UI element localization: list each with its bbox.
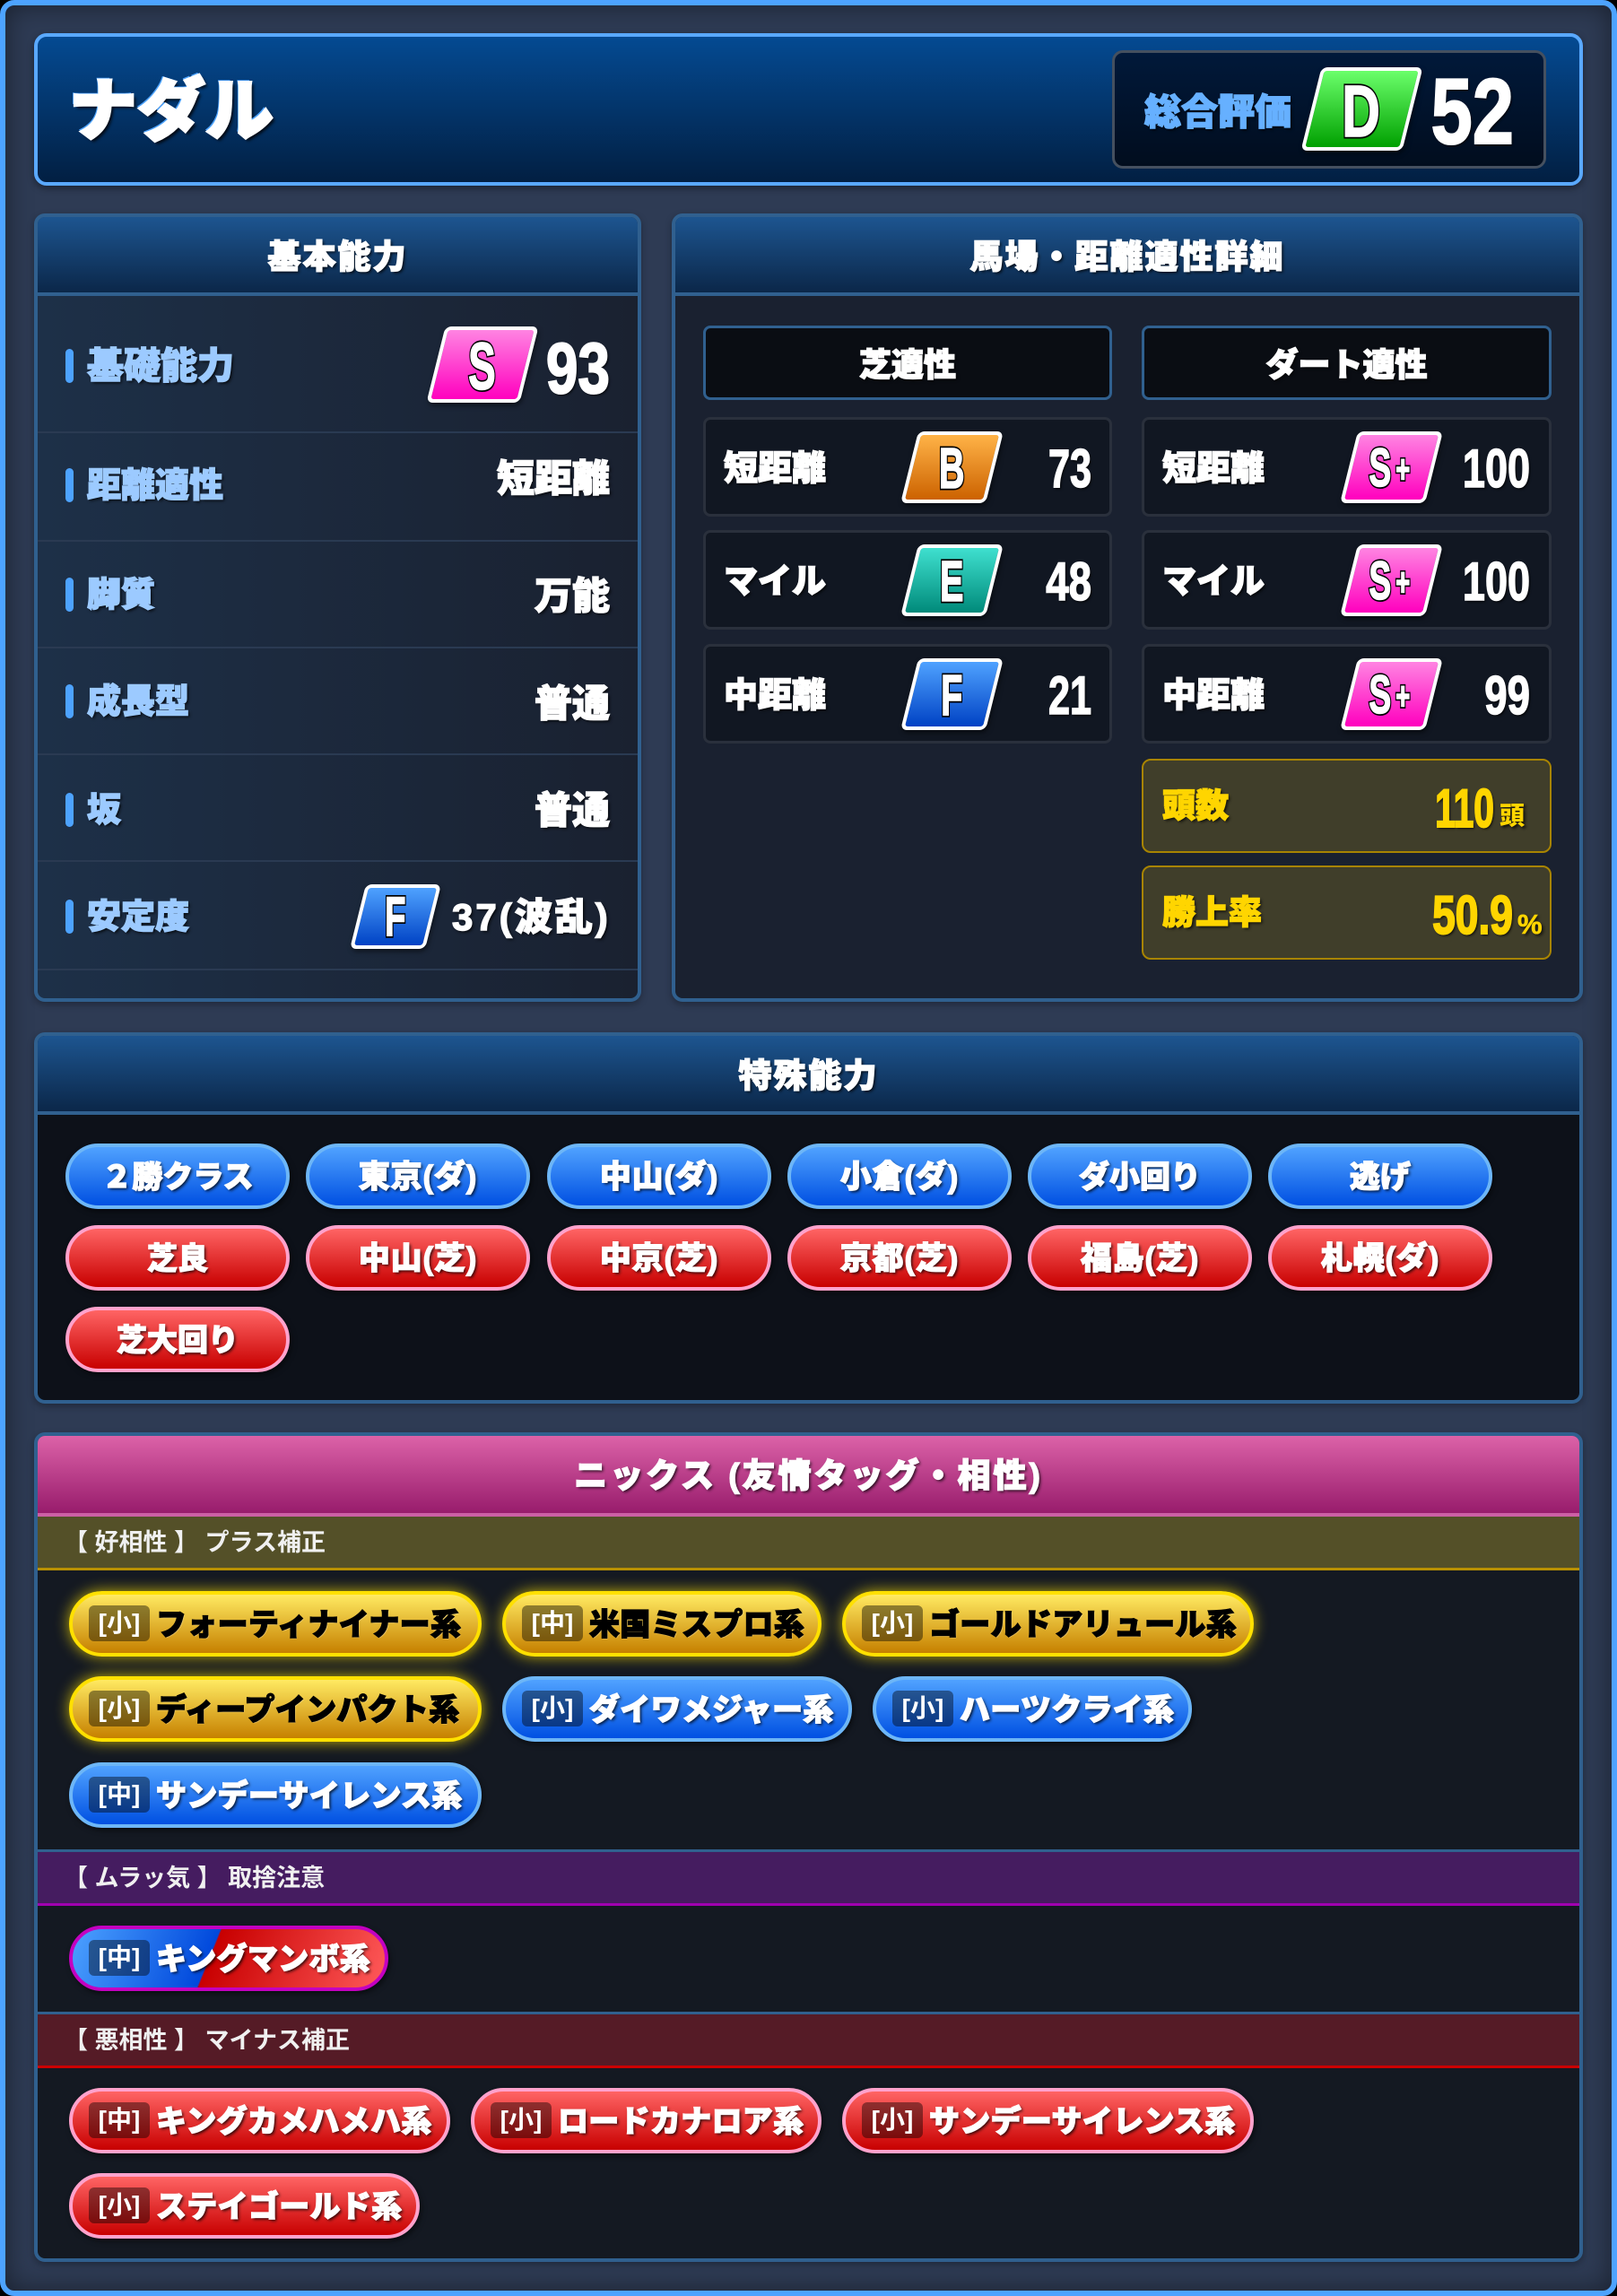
- pill: [1028, 1144, 1252, 1209]
- row: running style: [65, 575, 612, 617]
- panel: basic abilities: [34, 213, 641, 1002]
- nick pill: [69, 2173, 420, 2239]
- row: turf middle: 中距離: [724, 677, 826, 715]
- panel heading: ニックス (友情タッグ・相性): [574, 1457, 1043, 1494]
- panel: special abilities: [34, 1032, 1583, 1404]
- value: 普通: [535, 683, 610, 725]
- nick pill: ハーツクライ系: [960, 1693, 1174, 1727]
- badge E: [900, 544, 1004, 616]
- overall rating box: [1112, 50, 1546, 169]
- row: dirt short: [1142, 417, 1552, 517]
- stat: head count: [1142, 759, 1552, 853]
- nick pill: [中]: [99, 2106, 140, 2134]
- nick pill: [69, 1591, 482, 1657]
- section: variable: [38, 1852, 1579, 1906]
- section: good compatibility: 【 好相性 】 プラス補正: [64, 1529, 326, 1556]
- badge S+: [1340, 544, 1443, 616]
- badge F: F: [941, 663, 962, 727]
- pill: [65, 1144, 290, 1209]
- title: horse name: ナダル: [69, 74, 274, 150]
- value: 93: [546, 328, 610, 408]
- nick pill: ディープインパクト系: [156, 1693, 460, 1727]
- nick pill: キングマンボ系: [156, 1943, 370, 1977]
- section: variable: 【 ムラッ気 】 取捨注意: [64, 1865, 325, 1892]
- nick pill: [842, 2088, 1254, 2153]
- section: bad compatibility: 【 悪相性 】 マイナス補正: [64, 2027, 350, 2054]
- value: 110: [1435, 778, 1494, 839]
- dirt column heading: [1142, 326, 1552, 400]
- badge S+: S: [1369, 665, 1391, 725]
- row: turf mile: [703, 530, 1112, 630]
- section: bad compatibility: [38, 2014, 1579, 2068]
- pill: [306, 1144, 530, 1209]
- badge B: B: [939, 436, 965, 500]
- value: 48: [1046, 552, 1091, 612]
- nick pill: [69, 1926, 388, 1991]
- pill: [306, 1225, 530, 1291]
- nick pill: [873, 1676, 1192, 1742]
- nick pill: [小]: [532, 1694, 573, 1722]
- nick pill: サンデーサイレンス系: [929, 2105, 1236, 2139]
- nick pill: [小]: [902, 1694, 943, 1722]
- value: 50.9: [1432, 885, 1513, 945]
- panel heading: [38, 1036, 1579, 1115]
- nick pill: [502, 1591, 822, 1657]
- nick pill: [69, 2088, 450, 2153]
- value: 100: [1463, 439, 1530, 499]
- label: 坂: [87, 792, 121, 830]
- overall rating label: 総合評価: [1144, 91, 1291, 133]
- nick pill: ダイワメジャー系: [589, 1693, 834, 1727]
- label: 成長型: [87, 683, 189, 721]
- value: 万能: [535, 575, 610, 617]
- stat: win rate: 勝上率: [1162, 894, 1262, 931]
- grade badge F: [350, 884, 441, 949]
- row: turf short: 短距離: [724, 450, 826, 488]
- badge F: [900, 658, 1004, 730]
- pill: 東京(ダ): [359, 1160, 477, 1195]
- nick pill: [69, 1676, 482, 1742]
- nick pill: [小]: [872, 1609, 913, 1637]
- nick pill: ゴールドアリュール系: [929, 1608, 1237, 1642]
- label: 基礎能力: [87, 345, 234, 387]
- overall score: 52: [1430, 60, 1514, 164]
- pill: 小倉(ダ): [840, 1160, 959, 1195]
- overall grade badge D: [1300, 67, 1423, 151]
- value: 普通: [535, 789, 610, 831]
- grade badge S: [426, 326, 539, 403]
- badge E: E: [940, 549, 963, 613]
- stat: win rate: [1142, 865, 1552, 960]
- pill: 中山(ダ): [600, 1160, 718, 1195]
- label: 脚質: [87, 577, 155, 614]
- nick pill: [中]: [532, 1609, 573, 1637]
- nick pill: [471, 2088, 822, 2153]
- panel: nicks: [34, 1432, 1583, 2262]
- row: dirt middle: 中距離: [1162, 677, 1265, 715]
- nick pill: [小]: [500, 2106, 542, 2134]
- badge S+: S: [1369, 438, 1391, 498]
- nick pill: ロードカナロア系: [558, 2105, 804, 2139]
- row: base ability: [65, 326, 610, 408]
- turf column heading: [703, 326, 1112, 400]
- label: 距離適性: [87, 467, 223, 505]
- nick pill: [842, 1591, 1254, 1657]
- nick pill: [中]: [99, 1944, 140, 1971]
- row: dirt middle: [1142, 644, 1552, 744]
- stat: head count: 頭数: [1162, 787, 1229, 824]
- row: turf mile: マイル: [724, 563, 826, 601]
- value: 73: [1048, 439, 1091, 499]
- row: dirt mile: マイル: [1162, 563, 1265, 601]
- value: 短距離: [497, 457, 610, 500]
- row: turf middle: [703, 644, 1112, 744]
- panel heading: [675, 217, 1579, 296]
- turf column heading: 芝適性: [859, 346, 956, 383]
- panel: surface and distance aptitude: [672, 213, 1583, 1002]
- panel heading: 特殊能力: [739, 1057, 879, 1094]
- pill: [787, 1144, 1012, 1209]
- row: turf short: [703, 417, 1112, 517]
- pill: ダ小回り: [1079, 1161, 1201, 1195]
- pill: [65, 1225, 290, 1291]
- nick pill: フォーティナイナー系: [156, 1608, 461, 1642]
- badge S+: [1340, 658, 1443, 730]
- panel heading: [38, 1436, 1579, 1517]
- nick pill: [中]: [99, 1780, 140, 1808]
- nick pill: [小]: [99, 1609, 140, 1637]
- row: dirt short: 短距離: [1162, 450, 1265, 488]
- pill: [65, 1307, 290, 1372]
- pill: [1268, 1225, 1492, 1291]
- label: 安定度: [87, 899, 189, 936]
- badge S+: S: [1369, 551, 1391, 611]
- unit: %: [1517, 909, 1543, 940]
- value: 21: [1048, 665, 1091, 726]
- nick pill: 米国ミスプロ系: [589, 1608, 804, 1642]
- nick pill: [69, 1762, 482, 1828]
- section: good compatibility: [38, 1517, 1579, 1570]
- row: growth: [65, 682, 612, 725]
- nick pill: [小]: [99, 2191, 140, 2219]
- grade badge S: S: [468, 329, 496, 404]
- pill: [1028, 1225, 1252, 1291]
- row: dirt mile: [1142, 530, 1552, 630]
- pill: 中山(芝): [359, 1241, 477, 1276]
- nick pill: キングカメハメハ系: [156, 2105, 432, 2139]
- value: 100: [1463, 552, 1530, 612]
- badge S+: +: [1395, 561, 1410, 604]
- pill: 福島(芝): [1081, 1241, 1199, 1276]
- badge B: [900, 431, 1004, 503]
- nick pill: [小]: [872, 2106, 913, 2134]
- row: slope: [65, 789, 612, 831]
- pill: 京都(芝): [840, 1241, 959, 1276]
- pill: 中京(芝): [600, 1241, 718, 1276]
- nick pill: サンデーサイレンス系: [156, 1779, 463, 1813]
- header banner: [34, 33, 1583, 186]
- value: 37(波乱): [452, 896, 611, 938]
- pill: 逃げ: [1350, 1161, 1411, 1195]
- pill: [1268, 1144, 1492, 1209]
- pill: [787, 1225, 1012, 1291]
- row: distance: [65, 457, 612, 505]
- pill: [547, 1225, 771, 1291]
- grade badge F: F: [385, 886, 405, 948]
- pill: 芝大回り: [117, 1324, 239, 1358]
- panel heading: 馬場・距離適性詳細: [970, 239, 1284, 275]
- badge S+: +: [1395, 674, 1410, 718]
- pill: 札幌(ダ): [1321, 1241, 1439, 1276]
- pill: ２勝クラス: [101, 1161, 254, 1195]
- value: 99: [1484, 665, 1530, 726]
- pill: 芝良: [147, 1242, 208, 1276]
- unit: 頭: [1500, 802, 1525, 830]
- dirt column heading: ダート適性: [1265, 346, 1428, 383]
- nick pill: [小]: [99, 1694, 140, 1722]
- pill: [547, 1144, 771, 1209]
- panel heading: [38, 217, 638, 296]
- row: stability: [65, 884, 611, 952]
- badge S+: [1340, 431, 1443, 503]
- overall grade badge D: D: [1342, 71, 1380, 152]
- panel heading: 基本能力: [267, 239, 407, 275]
- nick pill: [502, 1676, 852, 1742]
- nick pill: ステイゴールド系: [156, 2190, 402, 2224]
- badge S+: +: [1395, 448, 1410, 491]
